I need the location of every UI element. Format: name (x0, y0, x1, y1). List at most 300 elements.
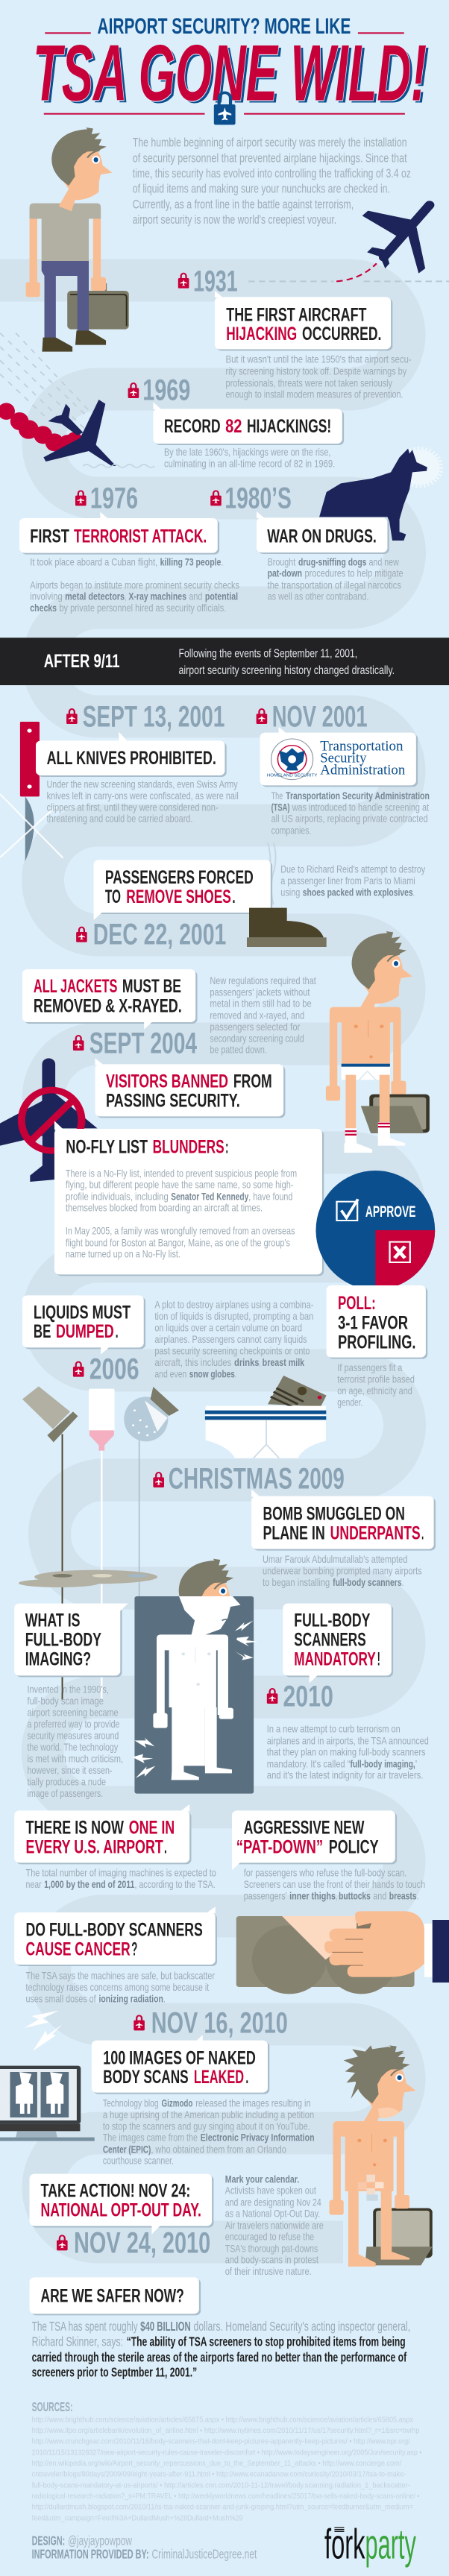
body: encouraged to refuse the (225, 2232, 314, 2243)
body: and new (368, 557, 399, 568)
body: Invented in the 1990's, (27, 1684, 109, 1695)
heading: VISITORS BANNED (106, 1071, 228, 1092)
band text (179, 647, 395, 677)
body: metal in them still had to be (210, 999, 312, 1010)
heading: LIQUIDS MUST (34, 1302, 131, 1323)
sources heading: SOURCES: (32, 2399, 73, 2414)
body: drug-sniffing dogs (298, 557, 366, 568)
conclusion text (32, 2319, 410, 2379)
panel: 1976 (19, 482, 239, 614)
panel: opt-out day (30, 2174, 324, 2278)
drink bottle (22, 1386, 78, 1700)
body: a preferred way to provide (27, 1719, 119, 1731)
band text: Following the events of September 11, 2001, (179, 647, 357, 660)
body: Gizmodo (162, 2098, 192, 2109)
panel: cancer: ? (131, 1939, 137, 1959)
body: involving (30, 592, 63, 602)
TSA wordmark (320, 739, 405, 778)
body (154, 1300, 313, 1380)
panel: no-fly list: : (225, 1136, 228, 1157)
icon: approve check (337, 1199, 358, 1221)
body: potential (205, 592, 238, 602)
body: In May 2005, a family was wrongfully removed from an overseas (66, 1226, 295, 1237)
body: removed and x-rayed, and (210, 1010, 304, 1021)
milk bottle (89, 1389, 115, 1699)
body: breast milk (263, 1358, 305, 1369)
body: tially produces a nude (27, 1777, 106, 1788)
body: companies. (271, 825, 311, 837)
heading: PASSENGERS FORCED (105, 867, 254, 888)
bubble (251, 1489, 436, 1551)
body: secondary screening could (210, 1033, 304, 1045)
body: is met with much criticism, (27, 1754, 123, 1765)
panel: sept 13 2001 (36, 700, 239, 825)
icon: knife (0, 722, 63, 861)
panel: one in every airport (14, 1804, 216, 1891)
date: NOV 16, 2010 (151, 2006, 288, 2040)
smoke trail (0, 403, 83, 453)
body: threatening and could be carried aboard. (47, 814, 192, 825)
body (47, 780, 239, 825)
panel: are we safer now (30, 2277, 410, 2379)
bubble (54, 1121, 324, 1276)
conclusion text: Richard Skinner, says: (32, 2334, 123, 2349)
body: New regulations required that (210, 976, 316, 987)
title rule left (44, 113, 205, 115)
bubble (14, 1604, 128, 1677)
heading: FIRST (30, 526, 69, 547)
panel: nov 2001 (257, 700, 430, 837)
illustration: man in underwear (326, 931, 430, 1153)
conclusion text: screeners prior to Septmber 11, 2001.” (32, 2365, 197, 2379)
illustration: liquids being dumped (19, 1386, 179, 1700)
bubble (14, 1804, 191, 1864)
body: inner thighs (289, 1892, 336, 1902)
body: mandatory. It's called “ (267, 1759, 351, 1770)
body: flying, but different people have the same name, so some high- (66, 1180, 294, 1191)
bubble (30, 2277, 201, 2315)
heading: FULL-BODY (294, 1610, 370, 1631)
date: 1976 (90, 482, 138, 515)
panel: christmas 2009: . (421, 1522, 424, 1543)
body (280, 865, 426, 898)
heading line 2: HIJACKING (226, 324, 297, 344)
date: DEC 22, 2001 (93, 918, 226, 951)
icon: rain of dashes (0, 333, 100, 430)
date: NOV 2001 (272, 700, 368, 734)
heading line 2: DUMPED (56, 1321, 114, 1342)
body (27, 1684, 123, 1800)
serpentine timeline path (0, 280, 405, 2242)
panel: scanners mandatory 2010 (267, 1604, 429, 1781)
heading: THE FIRST AIRCRAFT (226, 304, 367, 325)
body: terrorist profile based (337, 1374, 415, 1385)
credits: INFORMATION PROVIDED BY: (32, 2547, 149, 2561)
body: A plot to destroy airplanes using a combina- (154, 1300, 313, 1311)
icon: lightning bolts (25, 2011, 63, 2051)
heading: AFTER 9/11 (44, 651, 119, 672)
sources list: feed&utm_campaign=Feed%3A+DullardMush+%28Dullard+Mush%29 (32, 2514, 243, 2522)
heading line 2: SCANNERS (294, 1629, 366, 1650)
body: The (271, 791, 283, 802)
heading: AGGRESSIVE NEW (244, 1817, 365, 1838)
heading: MUST BE (122, 976, 181, 997)
heading: TERRORIST ATTACK. (74, 526, 207, 547)
body (164, 447, 335, 470)
body: . (163, 1994, 166, 2005)
body: past security screening checkpoints or onto (154, 1347, 310, 1357)
body: passengers' jackets without (210, 987, 310, 998)
body: however, since it essen- (27, 1766, 113, 1777)
illustration: plane taking off (362, 205, 430, 274)
panel: after 9/11 band (0, 637, 449, 685)
censored pixels (358, 2175, 383, 2201)
icon: lock (73, 1036, 84, 1051)
body: security measures around (27, 1731, 119, 1742)
body: , (336, 1892, 337, 1902)
heading: WHAT IS (25, 1610, 81, 1631)
heading line 2: 3-1 FAVOR (338, 1312, 408, 1333)
icon: lock (128, 383, 139, 398)
heading: ALL KNIVES PROHIBITED. (47, 748, 216, 769)
TSA wordmark: Security (320, 751, 366, 766)
body: gender. (337, 1397, 362, 1408)
body: name turned up on a No-Fly list. (66, 1250, 180, 1260)
icon: DHS seal (267, 739, 318, 780)
body: . (413, 887, 415, 898)
body: drinks (234, 1358, 259, 1369)
body: (TSA) (271, 802, 290, 813)
body: Mark your calendar. (225, 2174, 299, 2185)
conclusion text: The TSA has spent roughly (32, 2319, 138, 2334)
body (210, 976, 316, 1056)
heading: THERE IS NOW (26, 1817, 124, 1838)
body: near (26, 1880, 42, 1891)
body: flight bound for Boston at Bangor, Maine, as one of the group's (66, 1238, 290, 1249)
body: uses small doses of (26, 1994, 96, 2005)
bubble (19, 512, 219, 555)
bubble (94, 860, 272, 920)
body: be patted down. (210, 1045, 267, 1056)
icon: reject x (390, 1242, 410, 1262)
body: . (417, 1892, 419, 1902)
body: to stop the scanners and guy singing about it on YouTube. (103, 2121, 310, 2132)
body: technology raises concerns among some because it (26, 1983, 209, 1994)
body: themselves blocked from boarding an aircraft at times. (66, 1203, 263, 1214)
heading line 2: BE (34, 1321, 51, 1342)
date: 1969 (142, 374, 190, 407)
bubble (30, 2174, 213, 2235)
bubble (14, 1906, 217, 1966)
body: Under the new screening standards, even Swiss Army (47, 780, 238, 790)
date: 2006 (90, 1352, 139, 1386)
icon: banned plane (0, 1058, 98, 1182)
body: breasts (389, 1892, 417, 1902)
sources (32, 2399, 422, 2522)
heading: ALL JACKETS (34, 976, 117, 997)
panel: poll (327, 1285, 427, 1408)
illustration: underpants bomb (205, 1376, 327, 1458)
heading: NO-FLY LIST (66, 1136, 148, 1157)
credits (32, 2534, 257, 2561)
panel: no-fly list (54, 1121, 324, 1276)
body: of their intrusive nature. (225, 2267, 312, 2278)
heading: TAKE ACTION! NOV 24: (41, 2180, 190, 2201)
bubble (22, 1295, 145, 1355)
intro text (133, 136, 411, 227)
bubble (36, 732, 227, 777)
heading line 2: NATIONAL OPT-OUT DAY. (41, 2199, 201, 2220)
body: Activists have spoken out (225, 2186, 316, 2196)
body: on liquids over a certain volume on board (154, 1323, 302, 1334)
panel: liquids 2006: . (116, 1321, 119, 1342)
body: , (125, 592, 126, 602)
icon: lock (73, 1362, 84, 1377)
heading line 2: POLICY (329, 1836, 379, 1857)
body: . (235, 1369, 236, 1380)
red takeoff arc (336, 263, 377, 281)
body: a huge uprising of the American public including a petition (103, 2110, 314, 2121)
icon: lock (66, 709, 78, 724)
illustration: crashing plane (0, 400, 154, 467)
panel: scanners mandatory 2010: ! (377, 1648, 380, 1669)
panel: pat-down policy (232, 1810, 425, 1902)
body: Electronic Privacy Information (201, 2133, 315, 2144)
credits: CriminalJusticeDegree.net (151, 2547, 257, 2561)
heading line 2: EVERY U.S. AIRPORT (26, 1836, 163, 1857)
body: full-body scanners (333, 1578, 402, 1589)
body: Center (EPIC) (103, 2144, 151, 2155)
scanned body (153, 1596, 240, 1780)
heading: FROM (233, 1071, 272, 1092)
heading line 2: . (232, 887, 236, 907)
heading: HIJACKINGS! (247, 416, 331, 437)
panel: what is full-body imaging (14, 1604, 128, 1800)
body: passengers' (244, 1892, 287, 1902)
heading line 2: CAUSE CANCER (26, 1939, 131, 1959)
heading: WAR ON DRUGS. (267, 526, 377, 547)
panel: sept 2004 (22, 969, 316, 1060)
bubble (95, 1058, 285, 1118)
body: metal detectors (65, 592, 125, 602)
panel: cancer (14, 1906, 217, 2005)
body: 1,000 by the end of 2011 (44, 1880, 134, 1891)
body: on age, ethnicity and (337, 1386, 412, 1397)
body: Technology blog (103, 2098, 159, 2109)
bubble (153, 402, 344, 445)
heading line 2: PASSING SECURITY. (106, 1090, 240, 1111)
body: the world. The technology (27, 1742, 119, 1754)
heading line 2: PLANE IN (263, 1522, 325, 1543)
TSA wordmark: Administration (320, 763, 405, 778)
icon: lock (75, 491, 87, 506)
body: buttocks (339, 1892, 371, 1902)
icon: lock (178, 274, 189, 289)
icon: DHS seal: HOMELAND SECURITY (267, 774, 318, 778)
date: SEPT 13, 2001 (83, 700, 224, 734)
panel: christmas 2009 (153, 1462, 436, 1589)
icon: laptop (0, 2066, 95, 2141)
body (26, 1971, 215, 2005)
body: , have found (248, 1191, 292, 1203)
date: NOV 24, 2010 (74, 2226, 210, 2260)
date: 1931 (193, 265, 238, 298)
body: The images came from the (103, 2133, 198, 2144)
heading line 2: “PAT-DOWN” (236, 1836, 323, 1857)
panel: liquids 2006 (22, 1295, 313, 1386)
subtitle rule right (358, 32, 404, 34)
credits: @jayjaypowpow (68, 2534, 132, 2548)
icon: lock (57, 2235, 68, 2250)
body: TSA's thorough pat-downs (225, 2243, 318, 2255)
body: and (189, 592, 202, 602)
heading: 82 (225, 416, 242, 437)
heading: BLUNDERS (153, 1136, 224, 1157)
bubble (327, 1285, 427, 1359)
body: . (221, 557, 223, 568)
heading line 2: TO (105, 887, 121, 907)
illustration: body scanner (132, 1559, 258, 1794)
title block (33, 13, 430, 125)
body: X-ray machines (128, 592, 186, 602)
body: airport screening became (27, 1707, 119, 1719)
icon: title lock (214, 92, 236, 125)
body: full-body scan image (27, 1696, 104, 1707)
body: If passengers fit a (337, 1363, 403, 1374)
body: Air travelers nationwide are (225, 2220, 324, 2232)
date: SEPT 2004 (90, 1027, 197, 1060)
body (268, 557, 404, 602)
panel: 1969 (128, 374, 344, 470)
body (30, 557, 239, 614)
body: aircraft, this includes (154, 1358, 231, 1369)
body: passengers selected for (210, 1022, 300, 1033)
body: Airports began to institute more prominent security checks (30, 580, 239, 591)
bubble (22, 969, 198, 1030)
bubble (92, 2035, 269, 2094)
body (26, 1868, 216, 1891)
panel: one in every airport: . (164, 1836, 167, 1857)
heading line 2: FULL-BODY (25, 1629, 101, 1650)
icon: lock (153, 1473, 164, 1487)
heading line 3: MANDATORY (294, 1648, 376, 1669)
icon: lock (134, 2015, 145, 2030)
body: and even (154, 1369, 186, 1380)
body: and are designating Nov 24 (225, 2197, 321, 2208)
heading: ARE WE SAFER NOW? (41, 2285, 184, 2306)
date: 2010 (283, 1680, 333, 1713)
body: by private personnel hired as security officials. (59, 603, 226, 614)
body (267, 1725, 429, 1781)
body: Brought (268, 557, 295, 568)
body (66, 1168, 297, 1260)
body: courthouse scanner. (103, 2156, 174, 2167)
body: checks (30, 603, 57, 614)
body: There is a No-Fly list, intended to prevent suspicious people from (66, 1168, 297, 1180)
panel: dec 22 2001 (76, 860, 426, 951)
body: , who obtained them from an Orlando (151, 2144, 286, 2155)
heading: ONE IN (129, 1817, 175, 1838)
body (337, 1363, 415, 1408)
illustration: police dog (319, 448, 442, 541)
icon: lock (76, 928, 87, 942)
illustration: pat-down hand (236, 1911, 449, 1994)
body: clippers at first, until they were considered non- (47, 802, 219, 813)
scan bolts (132, 1620, 258, 1778)
subtitle rule left (45, 32, 91, 34)
body (225, 2174, 324, 2278)
heading: DO FULL-BODY SCANNERS (26, 1919, 203, 1940)
body: The TSA says the machines are safe, but backscatter (26, 1971, 215, 1982)
body: snow globes (189, 1369, 235, 1380)
intro text: airport security is now the world's creepiest voyeur. (133, 212, 336, 227)
bubble (257, 511, 389, 554)
body: full-body imaging, (351, 1759, 415, 1770)
illustration: traveller with suitcase (26, 127, 129, 352)
body: as well as other contraband. (268, 592, 368, 602)
body: killing 73 people (160, 557, 221, 568)
icon: lock (210, 491, 222, 506)
body: as a National Opt-Out Day. (225, 2209, 320, 2220)
body (263, 1555, 422, 1589)
smoke lines (268, 843, 276, 904)
panel: 1931 (178, 265, 412, 400)
body: procedures to help mitigate (304, 569, 404, 579)
puddles (19, 1570, 157, 1587)
TSA wordmark: Transportation (320, 739, 404, 754)
bubble (283, 1604, 393, 1683)
body: released the images resulting in (195, 2098, 311, 2109)
body: image of passengers. (27, 1789, 103, 1800)
icon: shoe (247, 908, 327, 947)
body: Senator Ted Kennedy (171, 1191, 249, 1203)
title rule right (244, 113, 405, 115)
body: knives left in carry-ons were confiscated, as were nail (47, 791, 239, 802)
body: By the late 1960's, hijackings were on the rise, (164, 447, 330, 459)
body (244, 1868, 425, 1902)
heading line 3: IMAGING? (25, 1648, 91, 1669)
bubble (215, 291, 392, 350)
bubble (232, 1810, 397, 1870)
body: . (402, 1578, 404, 1589)
heading line 2: BODY SCANS (103, 2067, 189, 2088)
flight path dashes (248, 279, 449, 283)
body: , according to the TSA. (134, 1880, 216, 1891)
body: pat-down (268, 569, 302, 579)
heading line 2: REMOVED & X-RAYED. (34, 995, 182, 1016)
body: The total number of imaging machines is expected to (26, 1868, 216, 1879)
poll pie chart (315, 1171, 435, 1290)
body: , (259, 1358, 260, 1369)
body: tion of liquids is disrupted, prompting a ban (154, 1311, 313, 1323)
icon: lock (267, 1689, 277, 1704)
credits: DESIGN: (32, 2534, 65, 2548)
heading: 100 IMAGES OF NAKED (103, 2047, 256, 2068)
body: and (373, 1892, 386, 1902)
body (103, 2098, 315, 2167)
bubble (260, 727, 418, 787)
body: ionizing radiation (98, 1994, 163, 2005)
heading line 2: REMOVE SHOES (126, 887, 231, 907)
body: It took place aboard a Cuban flight, (30, 557, 157, 568)
illustration: panicked naked man (330, 2045, 433, 2267)
body: airplanes. Passengers cannot carry liquids (154, 1335, 307, 1346)
panel: visitors banned (95, 1058, 285, 1118)
heading: RECORD (164, 416, 221, 437)
icon: lock (257, 709, 267, 724)
body (271, 791, 430, 837)
body (226, 355, 412, 400)
